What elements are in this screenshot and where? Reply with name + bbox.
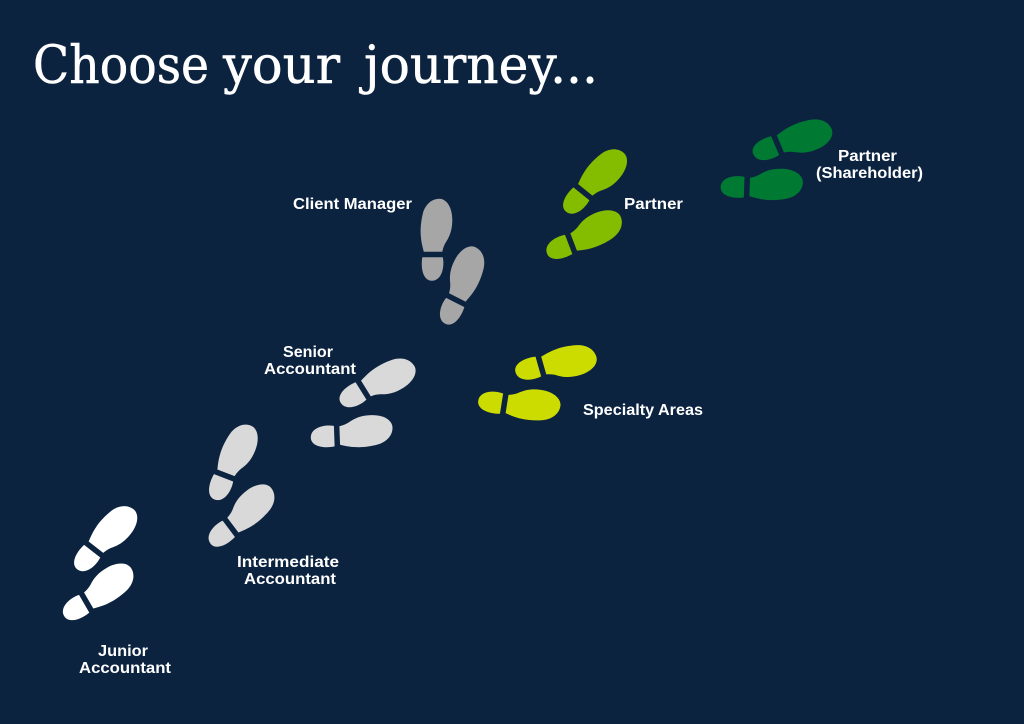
title: your: [222, 36, 340, 96]
icon: footprints specialty areas: [476, 339, 600, 425]
label: senior accountant: Senior: [283, 344, 333, 361]
label: senior accountant: [264, 344, 356, 378]
label: partner: Partner: [624, 196, 683, 213]
label: partner shareholder: (Shareholder): [816, 165, 923, 182]
label: junior accountant: Junior: [98, 643, 148, 660]
label: intermediate accountant: Accountant: [244, 571, 336, 588]
label: intermediate accountant: Intermediate: [237, 554, 339, 571]
icon: footprints junior accountant: [54, 498, 144, 626]
title: journey...: [359, 36, 598, 96]
icon: footprints senior accountant: [310, 350, 421, 449]
label: partner shareholder: [816, 148, 923, 182]
icon: footprints partner: [540, 141, 634, 264]
title: [33, 36, 598, 96]
label: intermediate accountant: [237, 554, 339, 588]
icon: footprints client manager: [421, 199, 492, 329]
label: junior accountant: Accountant: [79, 660, 171, 677]
icon: footprints partner shareholder: [720, 112, 837, 201]
label: specialty areas: Specialty Areas: [583, 402, 703, 419]
icon: footprints intermediate accountant: [198, 419, 283, 552]
title: Choose: [33, 36, 209, 96]
label: senior accountant: Accountant: [264, 361, 356, 378]
label: client manager: Client Manager: [293, 196, 412, 213]
label: junior accountant: [79, 643, 171, 677]
label: partner shareholder: Partner: [838, 148, 897, 165]
